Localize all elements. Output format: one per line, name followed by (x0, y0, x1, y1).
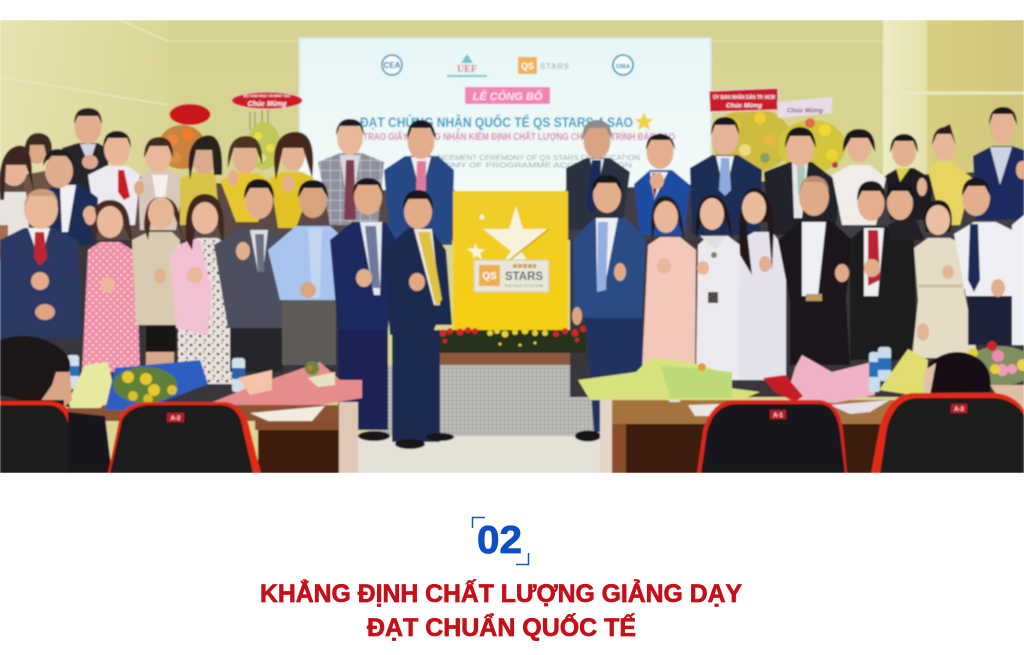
person (886, 134, 934, 220)
icon: small stars (419, 199, 485, 259)
person: edge (1012, 215, 1024, 345)
person (180, 135, 222, 225)
logo: CEA: CEA (384, 61, 401, 70)
person (0, 189, 82, 338)
logo: CEA (382, 55, 402, 75)
banner: Bộ Giáo dục và Đào tạo (232, 92, 302, 109)
bouquet: pink wrap (205, 361, 362, 405)
banner: red oval small (170, 104, 210, 125)
person (318, 119, 384, 225)
heading line 2: ĐẠT CHUẨN QUỐC TẾ (367, 612, 636, 642)
logo: accreditation seal: CSEA (616, 64, 630, 70)
chair with A-2 tag: A-2 (171, 416, 181, 422)
person (764, 127, 842, 235)
flowers left (158, 110, 281, 170)
person (634, 134, 690, 235)
banner: lilac card (777, 97, 832, 118)
person (738, 188, 786, 380)
person (88, 131, 140, 225)
person (954, 178, 1024, 345)
logo: QS Stars: STARS (540, 62, 570, 71)
logo plate (474, 260, 549, 292)
person (268, 180, 340, 365)
person (384, 120, 454, 245)
person (170, 194, 233, 384)
banner: Bộ Giáo dục và Đào tạo: BỘ GIÁO DỤC VÀ ĐÀO TẠO (244, 93, 291, 98)
chairs with red trim (0, 393, 1024, 473)
person (384, 190, 454, 449)
bracket bottom-right (516, 553, 528, 564)
front row: people (0, 175, 1024, 449)
person (22, 133, 60, 220)
logo plate: QS (482, 271, 497, 282)
bottle (232, 358, 245, 392)
screen subheading: TRAO GIẤY CHỨNG NHẬN KIỂM ĐỊNH CHẤT LƯỢNG CHƯƠNG TRÌNH ĐÀO TẠO (363, 130, 675, 143)
chair with A-3 tag (871, 393, 1024, 473)
desk: right (600, 398, 1024, 473)
chair with A-3 tag: A-3 (954, 407, 964, 413)
logo plate: RATING SYSTEM (505, 283, 544, 288)
screen English line 2: AUTONOMY OF PROGRAMME ACCREDITATION (410, 162, 632, 170)
seated woman, right (923, 352, 991, 395)
bottle (67, 355, 79, 389)
wall background (0, 20, 1024, 473)
person (572, 175, 646, 442)
banner: UBND TP HCM (709, 88, 778, 112)
number 02: 02 (477, 519, 522, 562)
papers on desk (250, 400, 890, 421)
bracket top-left (472, 518, 485, 528)
person (778, 176, 852, 365)
badge: Lễ công bố: LỄ CÔNG BỐ (473, 90, 543, 103)
screen English line 1: ANNOUNCEMENT CEREMONY OF QS STARS CERTIFICATION (410, 155, 640, 162)
person (40, 149, 98, 245)
person (917, 124, 972, 225)
person (886, 182, 925, 240)
person (330, 178, 396, 441)
person (0, 146, 34, 260)
badge: Lễ công bố (465, 87, 550, 104)
flower bed (438, 326, 586, 353)
section number with corner brackets (472, 518, 528, 564)
banner: Bộ Giáo dục và Đào tạo: Chúc Mừng (248, 101, 287, 108)
back row: people (0, 107, 1024, 260)
bouquet: pink wrap with red bow (763, 355, 875, 403)
flowers right (712, 108, 846, 172)
crowd backing shadow (0, 170, 1024, 402)
panel: LED screen (299, 38, 711, 238)
person (62, 108, 110, 195)
table items: water bottles and bouquets (65, 341, 1024, 421)
photo: group portrait at the QS Stars ceremony (0, 20, 1024, 473)
heading line 1: KHẲNG ĐỊNH CHẤT LƯỢNG GIẢNG DẠY (260, 578, 742, 608)
logo: accreditation seal (613, 55, 633, 75)
person (690, 117, 762, 235)
banner: UBND TP HCM: ỦY BAN NHÂN DÂN TP. HCM (713, 94, 775, 101)
person (912, 200, 978, 358)
banner: UBND TP HCM: Chúc Mừng (726, 102, 762, 110)
person (832, 129, 886, 225)
bottle (878, 347, 891, 381)
icon: large white star (483, 206, 549, 260)
banner: lilac card: Chúc Mừng (787, 108, 823, 114)
chair with A-1 tag (697, 400, 847, 473)
chair (0, 401, 82, 473)
bottle (869, 352, 880, 392)
person (850, 181, 916, 360)
person (270, 132, 314, 228)
desk: left (65, 402, 358, 473)
logo plate: STARS (505, 271, 543, 283)
panel: yellow QS Stars board (419, 191, 586, 353)
bouquet: green wrap (578, 358, 760, 400)
person (696, 195, 744, 380)
person (642, 196, 696, 370)
chair with A-2 tag (68, 402, 261, 473)
logo: QS Stars (518, 57, 570, 74)
person (566, 120, 630, 230)
logo: QS Stars: QS (521, 61, 534, 71)
logo: UEF: UEF (457, 64, 477, 75)
person (132, 197, 184, 370)
screen heading: ĐẠT CHỨNG NHẬN QUỐC TẾ QS STARS 4 SAO (360, 115, 633, 130)
person (82, 200, 140, 372)
person (214, 179, 290, 372)
person (134, 137, 184, 230)
podium: wood ledge, granite base, floor (355, 352, 605, 473)
flower stands and congratulation banners (158, 88, 846, 172)
seated man, left (0, 336, 72, 410)
person (220, 136, 272, 222)
person (973, 107, 1024, 220)
bouquet: yellow wrap (879, 349, 928, 395)
bouquet: yellow roses (65, 360, 208, 410)
logo: UEF (447, 54, 487, 77)
chair with A-1 tag: A-1 (773, 413, 783, 419)
icon: gold star (634, 112, 654, 130)
bouquet: roses (966, 341, 1024, 415)
bottle (668, 362, 681, 402)
